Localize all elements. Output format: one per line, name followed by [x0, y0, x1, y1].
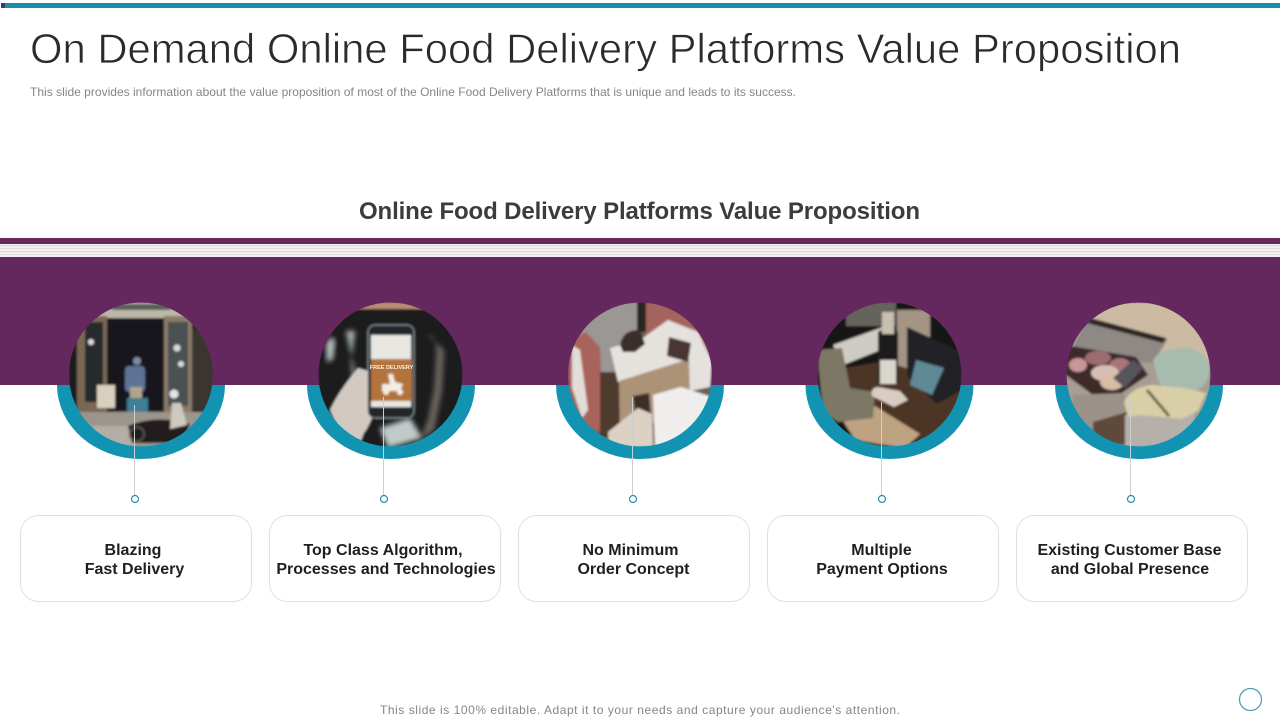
section heading: Online Food Delivery Platforms Value Proposition: [359, 198, 920, 225]
photo: card payment at table: [817, 302, 962, 448]
connector: item 3: [630, 397, 636, 502]
card: No Minimum Order Concept: Order Concept: [577, 561, 690, 578]
card: Multiple Payment Options: [768, 516, 998, 602]
card: Blazing Fast Delivery: Fast Delivery: [85, 561, 184, 578]
card: Blazing Fast Delivery: Blazing: [105, 542, 161, 559]
photo: produce box: [1066, 302, 1211, 447]
footer note: This slide is 100% editable. Adapt it to your needs and capture your audience's attention.: [380, 703, 900, 717]
icon: corner circle: [1240, 688, 1262, 710]
card: Existing Customer Base: and Global Presence: [1051, 561, 1209, 578]
card: Existing Customer Base: [1016, 516, 1248, 602]
card: Existing Customer Base: Existing Customer Base: [1037, 542, 1222, 559]
connector: item 5: [1128, 397, 1134, 502]
photo: shopping bags: [568, 302, 712, 447]
connector: item 1: [132, 405, 138, 502]
card: No Minimum Order Concept: [518, 516, 750, 602]
photo: delivery man at storefront: [69, 302, 213, 447]
teal half rings: [57, 385, 1223, 459]
purple banner with stripes: [0, 238, 1280, 385]
connector: item 2: [380, 397, 388, 502]
top accent bar: [1, 3, 1280, 8]
photo: hand holding phone with free delivery ad: [318, 302, 463, 448]
card: Multiple Payment Options: Payment Options: [816, 561, 948, 578]
card: Top Class Algorithm: [270, 516, 500, 602]
card: No Minimum Order Concept: No Minimum: [582, 542, 678, 559]
card: Blazing Fast Delivery: [20, 516, 252, 602]
card: Top Class Algorithm: Processes and Technologies: [276, 561, 496, 578]
card: Multiple Payment Options: Multiple: [851, 542, 912, 559]
ad text: FREE DELIVERY: [370, 365, 414, 371]
title: On Demand Online Food Delivery Platforms Value Proposition: [30, 25, 1181, 72]
connector: item 4: [878, 402, 886, 502]
subtitle: This slide provides information about the value proposition of most of the Online Food Delivery Platforms that is unique and leads to its success.: [30, 85, 796, 99]
card: Top Class Algorithm: Top Class Algorithm,: [303, 542, 463, 559]
